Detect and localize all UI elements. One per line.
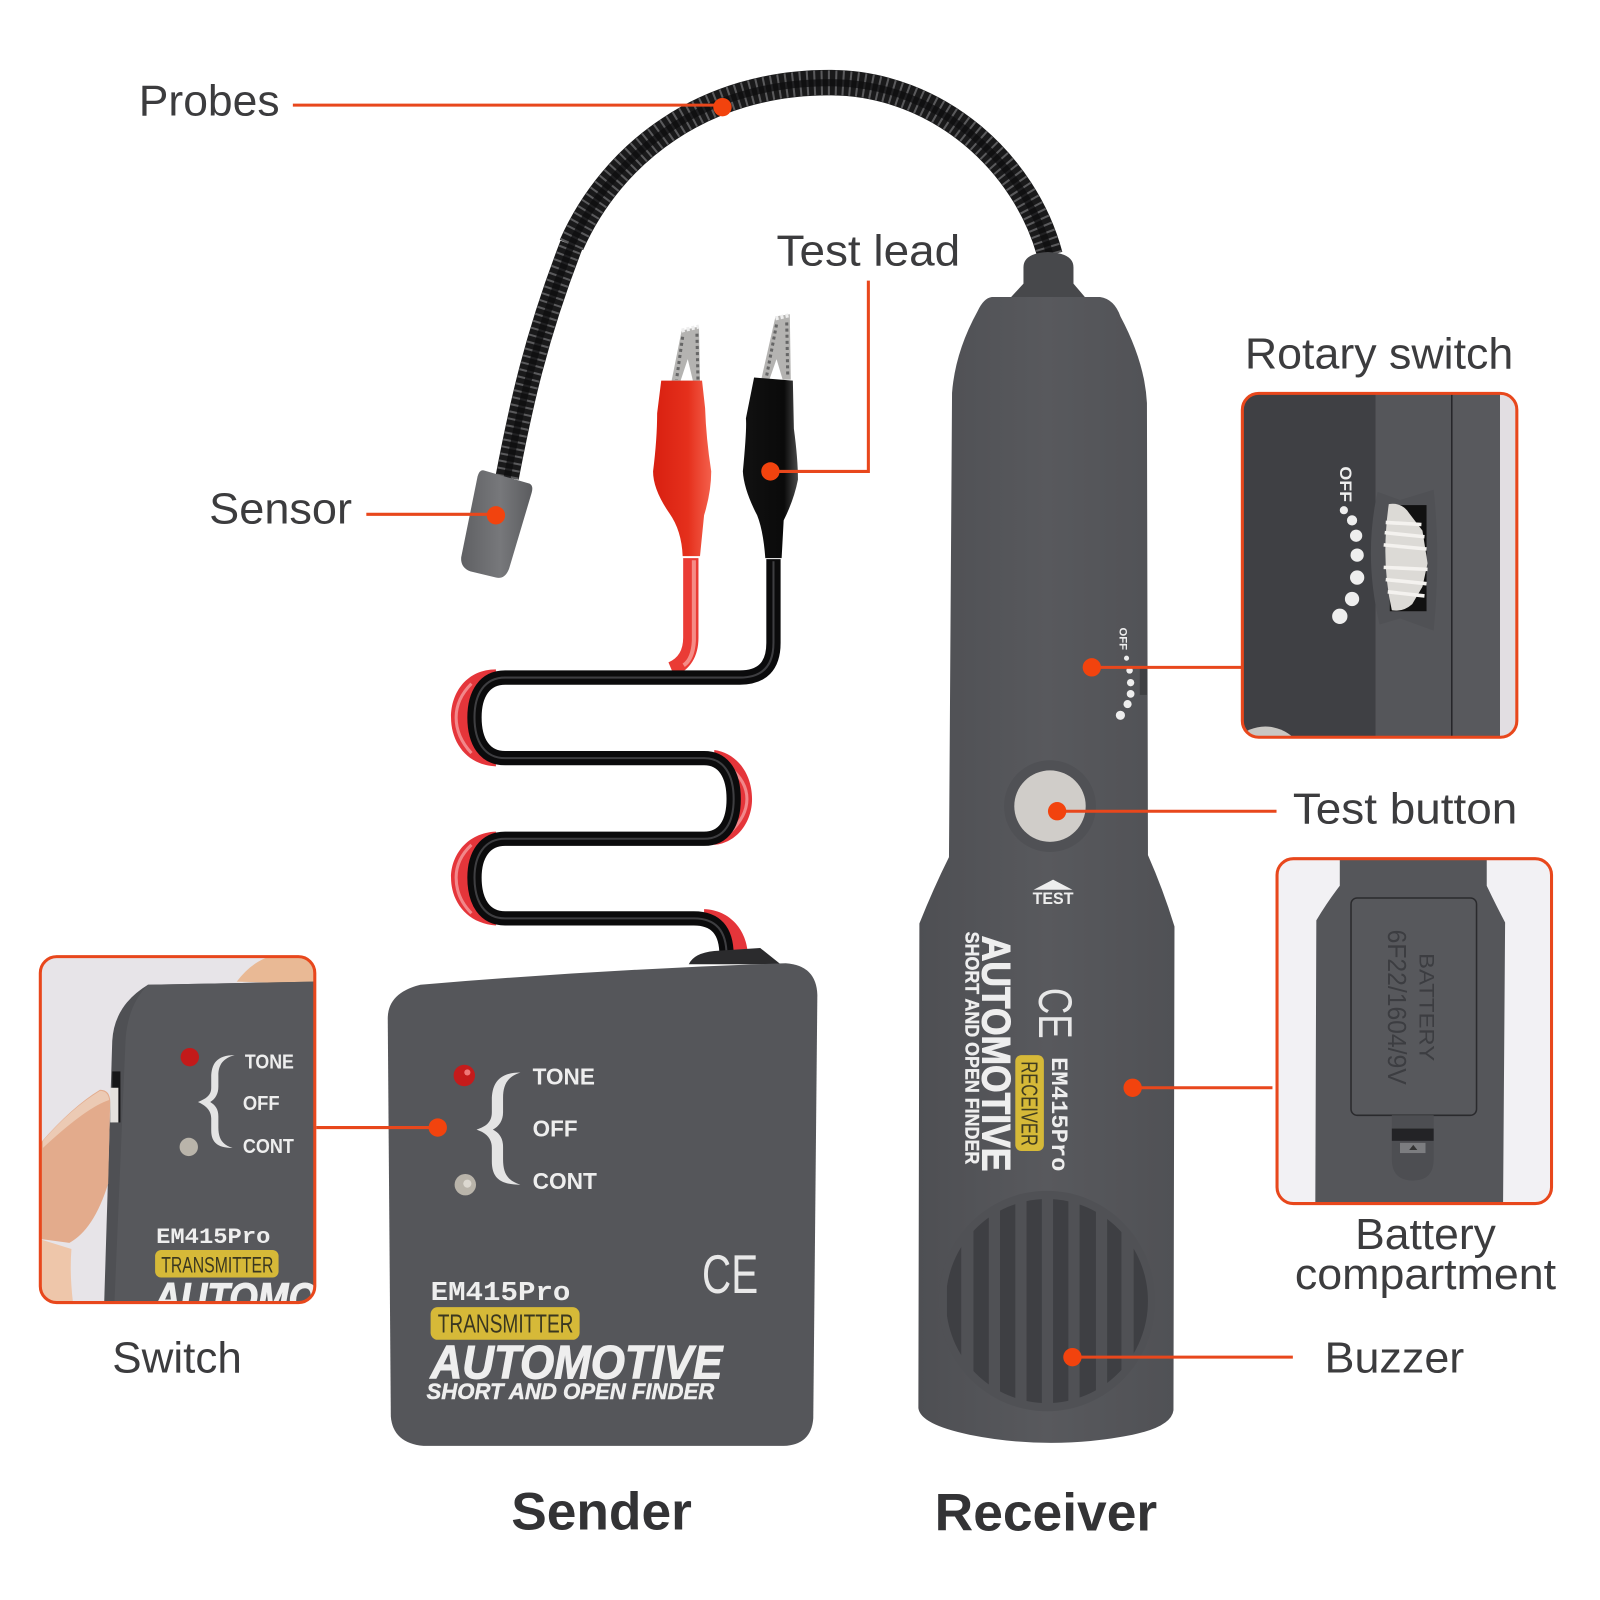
callout: sensor [209,484,505,533]
receiver product print [960,932,1081,1171]
sender product print [427,1278,724,1404]
buzzer grille [947,1199,1148,1403]
device body [104,982,316,1306]
probe: flexible gooseneck [507,83,1050,478]
panel: switch close-up [38,955,316,1304]
panel: battery compartment close-up [1277,858,1552,1205]
rotary dial marks: OFF [1116,628,1128,650]
callout: battery compartment [1123,1079,1556,1299]
rotary wheel [1384,504,1428,611]
callout: test lead [761,226,960,481]
brace [477,1072,520,1185]
rotary marks [1332,466,1364,624]
callout: battery compartment: compartment [1295,1250,1556,1299]
sender product print: TRANSMITTER [438,1311,573,1339]
battery latch [1392,1115,1434,1181]
black alligator clip [743,314,798,558]
switch positions [533,1064,598,1194]
panel: rotary switch close-up [1240,392,1518,739]
panel: switch close-up: EM415Pro [156,1224,270,1250]
finger: top [236,958,314,982]
callout: test button [1048,784,1517,833]
receiver product print: AUTOMOTIVE [974,936,1018,1171]
CE mark: CE [702,1243,758,1305]
red wire bends [451,669,752,955]
callout: probes: Probes [139,76,280,125]
switch positions: OFF [533,1116,578,1142]
switch positions: CONT [533,1168,598,1194]
red alligator clip [653,327,711,669]
callout: test button: Test button [1293,784,1517,833]
panel: switch close-up: TONE [245,1051,294,1073]
panel: switch close-up: TRANSMITTER [161,1252,273,1277]
test lead: twin wire [451,559,773,955]
rotary dial marks [1116,628,1147,720]
callout: battery compartment: Battery [1355,1210,1496,1259]
battery embossed text: BATTERY [1414,953,1438,1061]
sender product print: SHORT AND OPEN FINDER [427,1379,715,1404]
callout: switch: Switch [112,1333,242,1382]
callout: switch [112,1118,447,1382]
switch positions: TONE [533,1064,595,1090]
sender body [388,948,817,1446]
receiver product print: EM415Pro [1044,1057,1071,1171]
inset LEDs [181,1048,199,1066]
panel: switch close-up: AUTOMOTIVE [153,1274,400,1321]
thumb [39,1090,110,1243]
sender product print: EM415Pro [431,1278,570,1308]
test arrow label: TEST [1033,890,1073,908]
callout: sensor: Sensor [209,484,352,533]
status LEDs [454,1065,476,1195]
receiver body [918,252,1174,1443]
callout: rotary switch [1083,329,1513,677]
receiver product print: CE [1029,988,1081,1039]
callout: buzzer [1063,1333,1464,1382]
callout: test lead: Test lead [777,226,960,275]
sensor cap [461,470,532,578]
rotary marks: OFF [1336,466,1354,502]
callout: rotary switch: Rotary switch [1245,329,1513,378]
test button [1004,760,1096,852]
panel: switch close-up: OFF [243,1093,280,1115]
battery embossed text: 6F22/1604/9V [1382,930,1410,1085]
callout: probes [139,76,732,125]
test arrow label [1033,880,1073,908]
battery cover [1351,898,1477,1115]
heading: receiver: Receiver [935,1484,1157,1543]
receiver product print: SHORT AND OPEN FINDER [960,932,982,1164]
panel: switch close-up: CONT [243,1136,294,1158]
battery embossed text [1382,930,1438,1085]
callout: buzzer: Buzzer [1324,1333,1464,1382]
black wire path [474,559,773,955]
heading: sender: Sender [511,1483,692,1542]
receiver product print: RECEIVER [1016,1061,1042,1146]
sender product print: AUTOMOTIVE [430,1337,724,1389]
